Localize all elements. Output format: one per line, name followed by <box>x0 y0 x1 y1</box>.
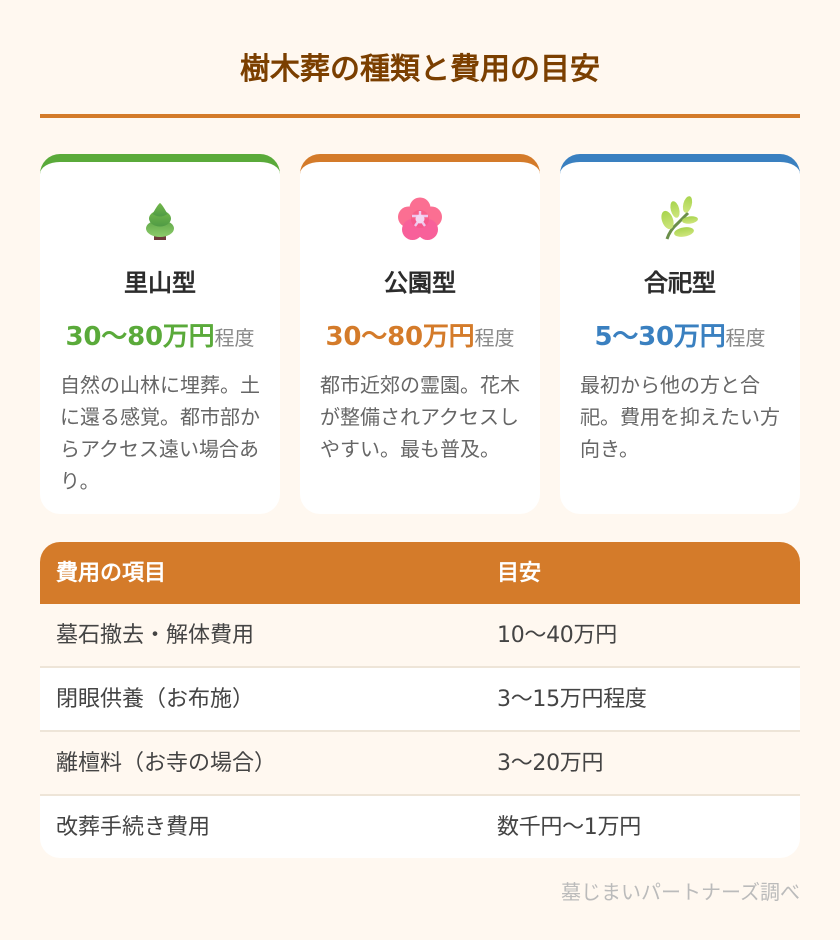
row: 改葬手続き費用 <box>56 815 641 840</box>
icon: evergreen tree <box>146 203 174 240</box>
description: 都市近郊の霊園。花木が整備されアクセスしやすい。最も普及。 <box>320 373 520 461</box>
description: 最初から他の方と合祀。費用を抑えたい方向き。 <box>580 373 780 461</box>
source note: 墓じまいパートナーズ調べ <box>561 880 800 904</box>
row: 離檀料 <box>40 732 800 794</box>
row: 離檀料: 離檀料（お寺の場合） <box>56 751 276 776</box>
row: 離檀料: 3〜20万円 <box>497 751 603 776</box>
cost table <box>40 542 800 858</box>
row: 閉眼供養: 閉眼供養（お布施） <box>56 687 254 712</box>
price: 30〜80万円程度 <box>66 322 254 352</box>
price: 30〜80万円程度 <box>326 322 514 352</box>
title underline <box>40 114 800 118</box>
icon: herb <box>661 196 698 240</box>
row: 墓石撤去: 10〜40万円 <box>497 623 617 648</box>
row: 墓石撤去 <box>40 604 800 666</box>
table header <box>40 542 800 604</box>
row: 墓石撤去: 墓石撤去・解体費用 <box>56 617 254 649</box>
table header: 目安 <box>497 561 541 586</box>
panel: 合祀型 <box>560 154 800 514</box>
row: 閉眼供養 <box>56 687 647 712</box>
row: 閉眼供養: 3〜15万円程度 <box>497 687 647 712</box>
row: 改葬手続き費用: 数千円〜1万円 <box>497 815 641 840</box>
title: 樹木葬の種類と費用の目安 <box>240 52 600 87</box>
panel: 公園型 <box>300 154 540 514</box>
table header: 費用の項目 <box>56 561 166 586</box>
price: 5〜30万円程度 <box>594 322 766 352</box>
card name: 公園型 <box>384 269 456 297</box>
card name: 合祀型 <box>644 269 716 297</box>
icon: cherry blossom <box>398 198 442 240</box>
row: 改葬手続き費用: 改葬手続き費用 <box>56 815 210 840</box>
card name: 里山型 <box>124 269 196 297</box>
description: 自然の山林に埋葬。土に還る感覚。都市部からアクセス遠い場合あり。 <box>60 373 260 493</box>
panel: 里山型 <box>40 154 280 514</box>
